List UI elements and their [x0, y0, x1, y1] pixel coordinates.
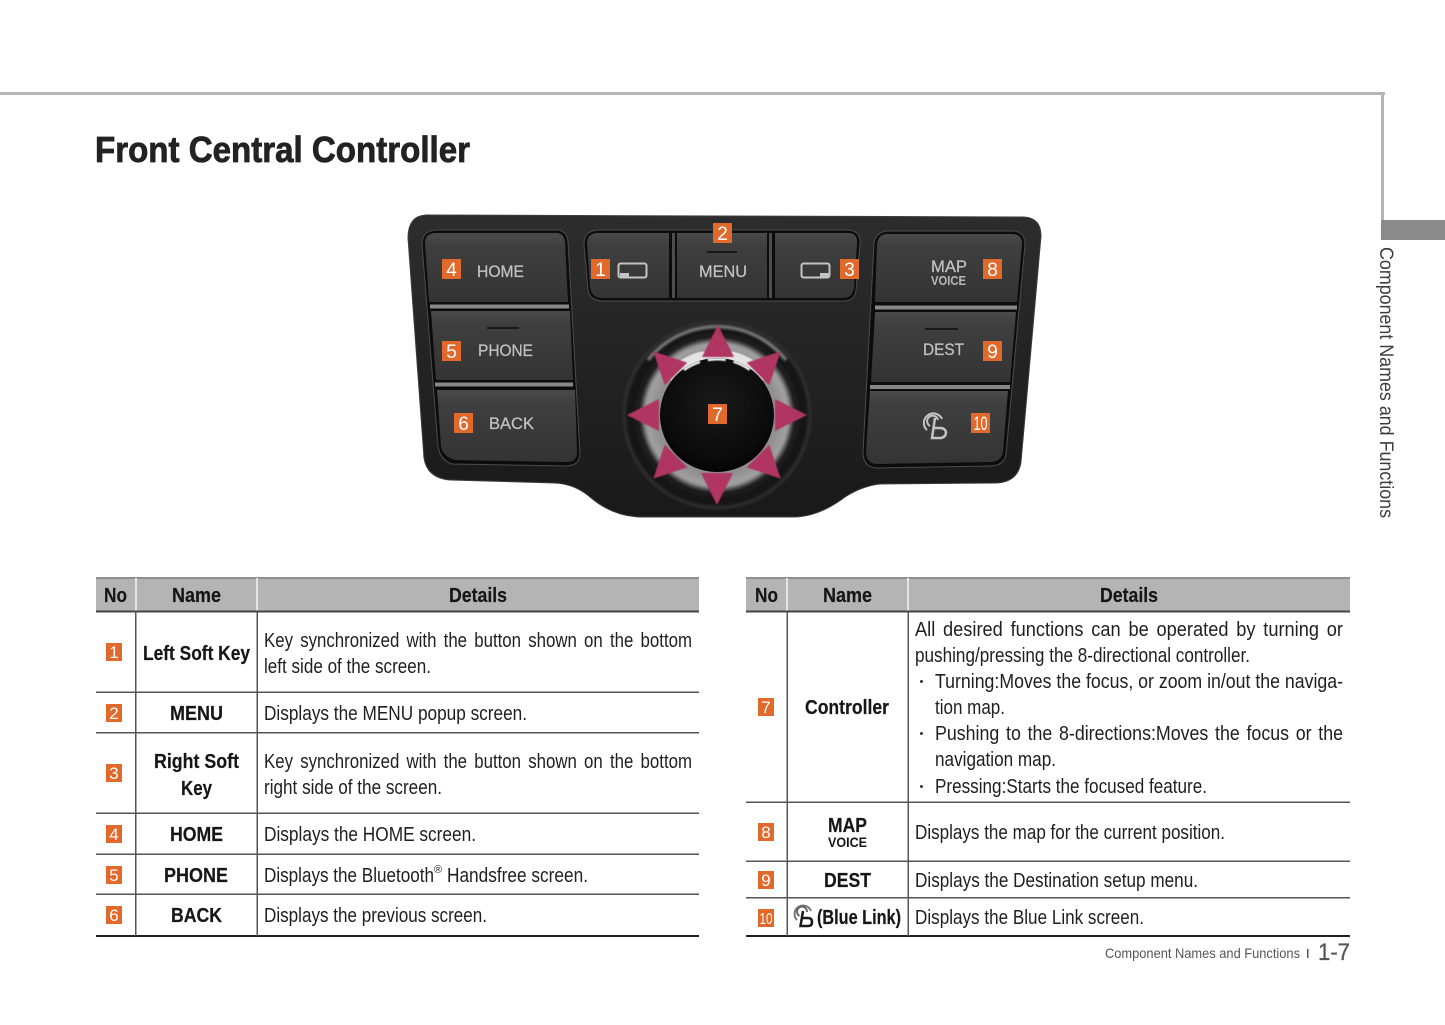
row 1: left side of the screen.: [264, 656, 431, 678]
outer chrome rim: [648, 327, 786, 360]
button labels: DEST: [923, 340, 964, 359]
row 7: navigation map.: [935, 749, 1056, 771]
row 2: MENU: [170, 703, 223, 725]
button labels: [477, 251, 967, 433]
row 8: 8: [761, 823, 771, 842]
number badges on controller: 4: [446, 260, 457, 281]
left table: [96, 577, 699, 937]
controller body: [408, 215, 1041, 517]
table header: Name: [172, 585, 221, 607]
eight direction arrows: [627, 325, 807, 505]
row 4: HOME: [170, 824, 223, 846]
row 3: Key synchronized with the button shown on the bottom: [264, 751, 692, 773]
number badges on controller: 2: [717, 224, 728, 245]
number badges on controller: 10: [974, 414, 988, 435]
button recesses: [422, 230, 1025, 468]
controller illustration: [408, 215, 1041, 517]
table header: Details: [1100, 585, 1158, 607]
button: home: [425, 233, 568, 302]
row 2: [106, 703, 527, 725]
row 9: 9: [761, 871, 771, 890]
button strip: soft keys and menu: [587, 233, 857, 298]
title: Front Central Controller: [95, 129, 470, 170]
row 7: Pushing to the 8-directions:Moves the focus or the: [935, 723, 1343, 745]
row 10: [758, 906, 1144, 929]
row 6: 6: [109, 906, 119, 925]
row 4: [106, 824, 476, 846]
row 7: All desired functions can be operated by turning or: [915, 619, 1343, 641]
number badges on controller: 5: [446, 342, 457, 363]
page frame: top rule and side rule: [0, 92, 1385, 222]
table header: [96, 577, 699, 611]
number badges on controller: 1: [595, 260, 606, 281]
table header: [746, 577, 1350, 611]
chrome highlights: [668, 354, 766, 378]
row 5: 5: [109, 866, 119, 885]
knob highlights: [684, 359, 750, 370]
row 5: PHONE: [164, 865, 228, 887]
side tab: [1381, 220, 1445, 240]
row 9: Displays the Destination setup menu.: [915, 870, 1198, 892]
row 5: ®: [434, 864, 442, 876]
row 10: Displays the Blue Link screen.: [915, 907, 1144, 929]
row 6: [106, 905, 487, 927]
row 2: 2: [109, 704, 119, 723]
button labels: VOICE: [931, 273, 966, 288]
number badges on controller: 8: [987, 260, 998, 281]
icon: right soft key screen: [802, 264, 830, 278]
button: back: [437, 390, 577, 462]
table header: No: [104, 585, 127, 607]
row 1: [106, 630, 692, 678]
icon: left soft key screen: [618, 264, 646, 278]
icon: blue link button: [924, 413, 946, 438]
button labels: PHONE: [478, 341, 533, 360]
button: dest: [871, 312, 1016, 382]
row 7: Controller: [805, 697, 889, 719]
row 10: 10: [760, 911, 773, 928]
footer section name: Component Names and Functions: [1105, 945, 1300, 961]
row 3: Right Soft: [154, 751, 239, 773]
button: map voice: [875, 234, 1022, 302]
row 4: Displays the HOME screen.: [264, 824, 476, 846]
side chapter label: Component Names and Functions: [1375, 247, 1396, 518]
number badges on controller: [442, 223, 1002, 435]
number badges on controller: 9: [987, 342, 998, 363]
row 1: Left Soft Key: [143, 643, 251, 665]
row 2: Displays the MENU popup screen.: [264, 703, 527, 725]
row 10: (Blue Link): [817, 907, 901, 929]
row 6: Displays the previous screen.: [264, 905, 487, 927]
row 5: Handsfree screen.: [447, 865, 588, 887]
footer page number: 1-7: [1318, 939, 1350, 966]
row 8: MAP: [828, 815, 867, 837]
row 7: 7: [761, 698, 771, 717]
row 4: 4: [109, 825, 119, 844]
row 8: Displays the map for the current position.: [915, 822, 1225, 844]
row 1: Key synchronized with the button shown on the bottom: [264, 630, 692, 652]
row 7: Turning:Moves the focus, or zoom in/out the naviga-: [935, 671, 1343, 693]
right table: [746, 577, 1350, 937]
right button dividers: [870, 306, 1017, 389]
row 5: Displays the Bluetooth: [264, 865, 434, 887]
button labels: BACK: [489, 414, 535, 433]
row 8: VOICE: [828, 834, 867, 850]
row 3: Key: [181, 778, 213, 800]
button labels: HOME: [477, 262, 524, 281]
rotary controller: [623, 321, 811, 509]
icon: blue link: [795, 906, 812, 926]
row 3: 3: [109, 764, 119, 783]
row 5: [106, 864, 588, 887]
row 8: [758, 815, 1225, 850]
row 7: pushing/pressing the 8-directional controller.: [915, 645, 1250, 667]
row 3: [106, 751, 692, 800]
left button dividers: [430, 304, 573, 386]
button labels: MENU: [699, 262, 747, 281]
button: phone: [431, 311, 573, 380]
row 1: 1: [109, 643, 119, 662]
number badges on controller: 6: [458, 414, 469, 435]
row 3: right side of the screen.: [264, 777, 442, 799]
table header: No: [755, 585, 778, 607]
row 6: BACK: [171, 905, 222, 927]
row 7: [758, 619, 1343, 798]
row 7: Pressing:Starts the focused feature.: [935, 776, 1207, 798]
table header: Details: [449, 585, 507, 607]
row 9: DEST: [824, 870, 871, 892]
row 7: tion map.: [935, 697, 1005, 719]
button labels: MAP: [931, 257, 967, 276]
row 9: [758, 870, 1198, 892]
number badges on controller: 3: [844, 260, 855, 281]
number badges on controller: 7: [712, 405, 723, 426]
button: blue link: [866, 391, 1008, 464]
table header: Name: [823, 585, 872, 607]
